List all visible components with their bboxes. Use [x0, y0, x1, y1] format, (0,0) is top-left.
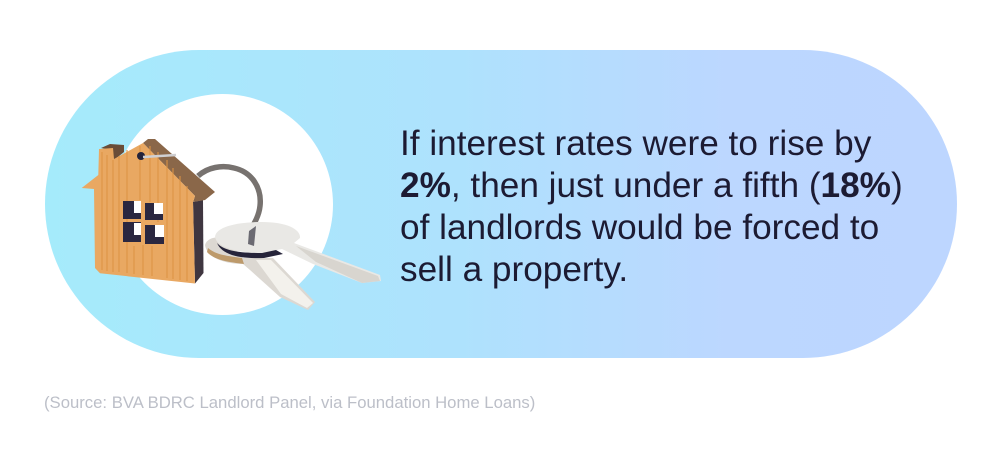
icon: tag window — [123, 201, 164, 244]
main statement text: 2%, then just under a fifth (18%) — [400, 166, 903, 205]
white circle behind icon — [112, 94, 333, 315]
source note: (Source: BVA BDRC Landlord Panel, via Foundation Home Loans) — [44, 393, 535, 412]
main statement text: If interest rates were to rise by — [400, 124, 871, 163]
main statement text: sell a property. — [400, 250, 628, 289]
icon: front key — [215, 222, 381, 283]
icon: wooden house tag — [82, 139, 215, 284]
house side — [193, 200, 204, 284]
roof edge — [143, 139, 215, 202]
main statement text: of landlords would be forced to — [400, 208, 879, 247]
house face — [82, 143, 195, 284]
panel: gradient pill background — [45, 50, 957, 358]
icon: back key — [205, 237, 315, 310]
main statement text — [400, 124, 903, 289]
icon: key ring — [198, 167, 260, 232]
chimney side — [101, 144, 124, 160]
